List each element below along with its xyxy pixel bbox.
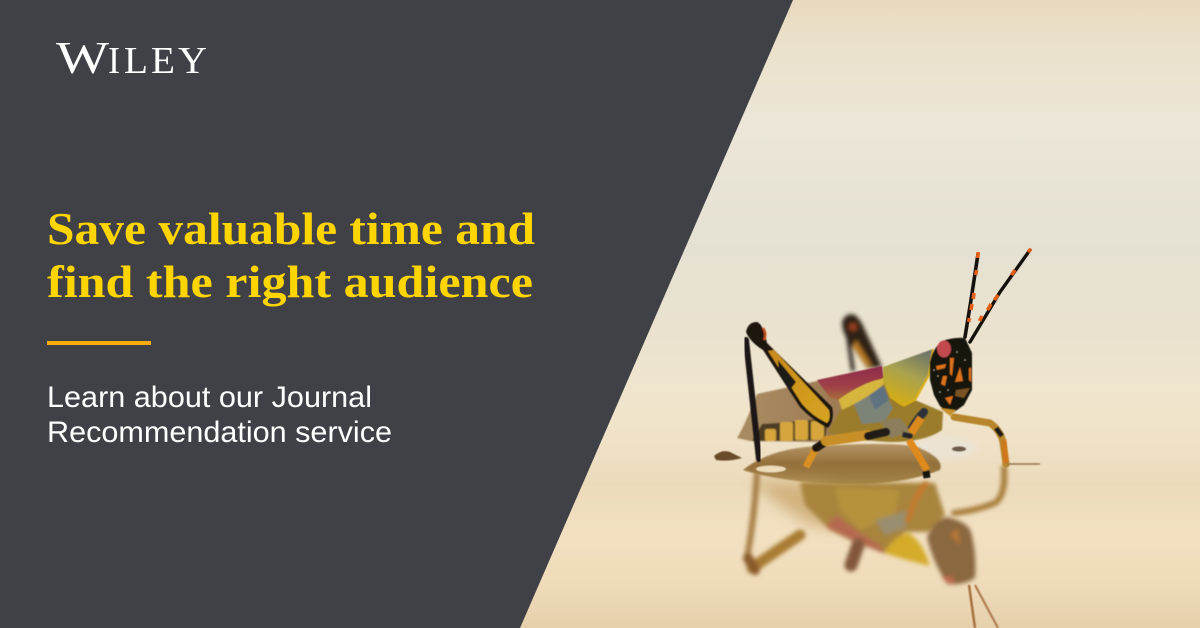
Wiley logo: I bbox=[108, 40, 120, 82]
reflected antennae bbox=[969, 585, 998, 628]
subheading bbox=[47, 381, 392, 449]
wet sand patch under the grasshopper bbox=[743, 437, 977, 484]
Wiley logo: L bbox=[124, 40, 148, 82]
reflected wing haze bbox=[752, 480, 845, 530]
reflection of the grasshopper bbox=[747, 468, 1004, 628]
headline bbox=[47, 204, 535, 307]
reflected legs bbox=[747, 468, 1004, 570]
dark diagonal panel bbox=[0, 0, 793, 628]
red wing bbox=[817, 366, 884, 400]
Wiley logo: Y bbox=[178, 40, 207, 82]
antennae bbox=[965, 249, 1031, 342]
Wiley logo bbox=[56, 33, 207, 83]
thorax bbox=[828, 374, 943, 442]
reflected body bbox=[800, 482, 976, 584]
Wiley logo: E bbox=[151, 40, 175, 82]
legs bbox=[806, 412, 1006, 478]
pronotum plate bbox=[883, 349, 933, 406]
abdomen bbox=[737, 380, 900, 442]
far hind leg bbox=[842, 314, 882, 371]
headline: Save valuable time and bbox=[47, 204, 535, 254]
near hind tibia bbox=[746, 340, 759, 459]
accent rule bbox=[47, 341, 151, 345]
photo background: sandy water bbox=[500, 0, 1200, 628]
headline: find the right audience bbox=[47, 257, 533, 307]
Wiley logo: W bbox=[56, 33, 110, 83]
stone, foam and waterline details bbox=[714, 446, 1040, 472]
near hind femur bbox=[746, 322, 833, 428]
grasshopper bbox=[714, 249, 1040, 478]
subheading: Learn about our Journal bbox=[47, 381, 372, 414]
subheading: Recommendation service bbox=[47, 416, 392, 449]
head bbox=[930, 338, 972, 416]
